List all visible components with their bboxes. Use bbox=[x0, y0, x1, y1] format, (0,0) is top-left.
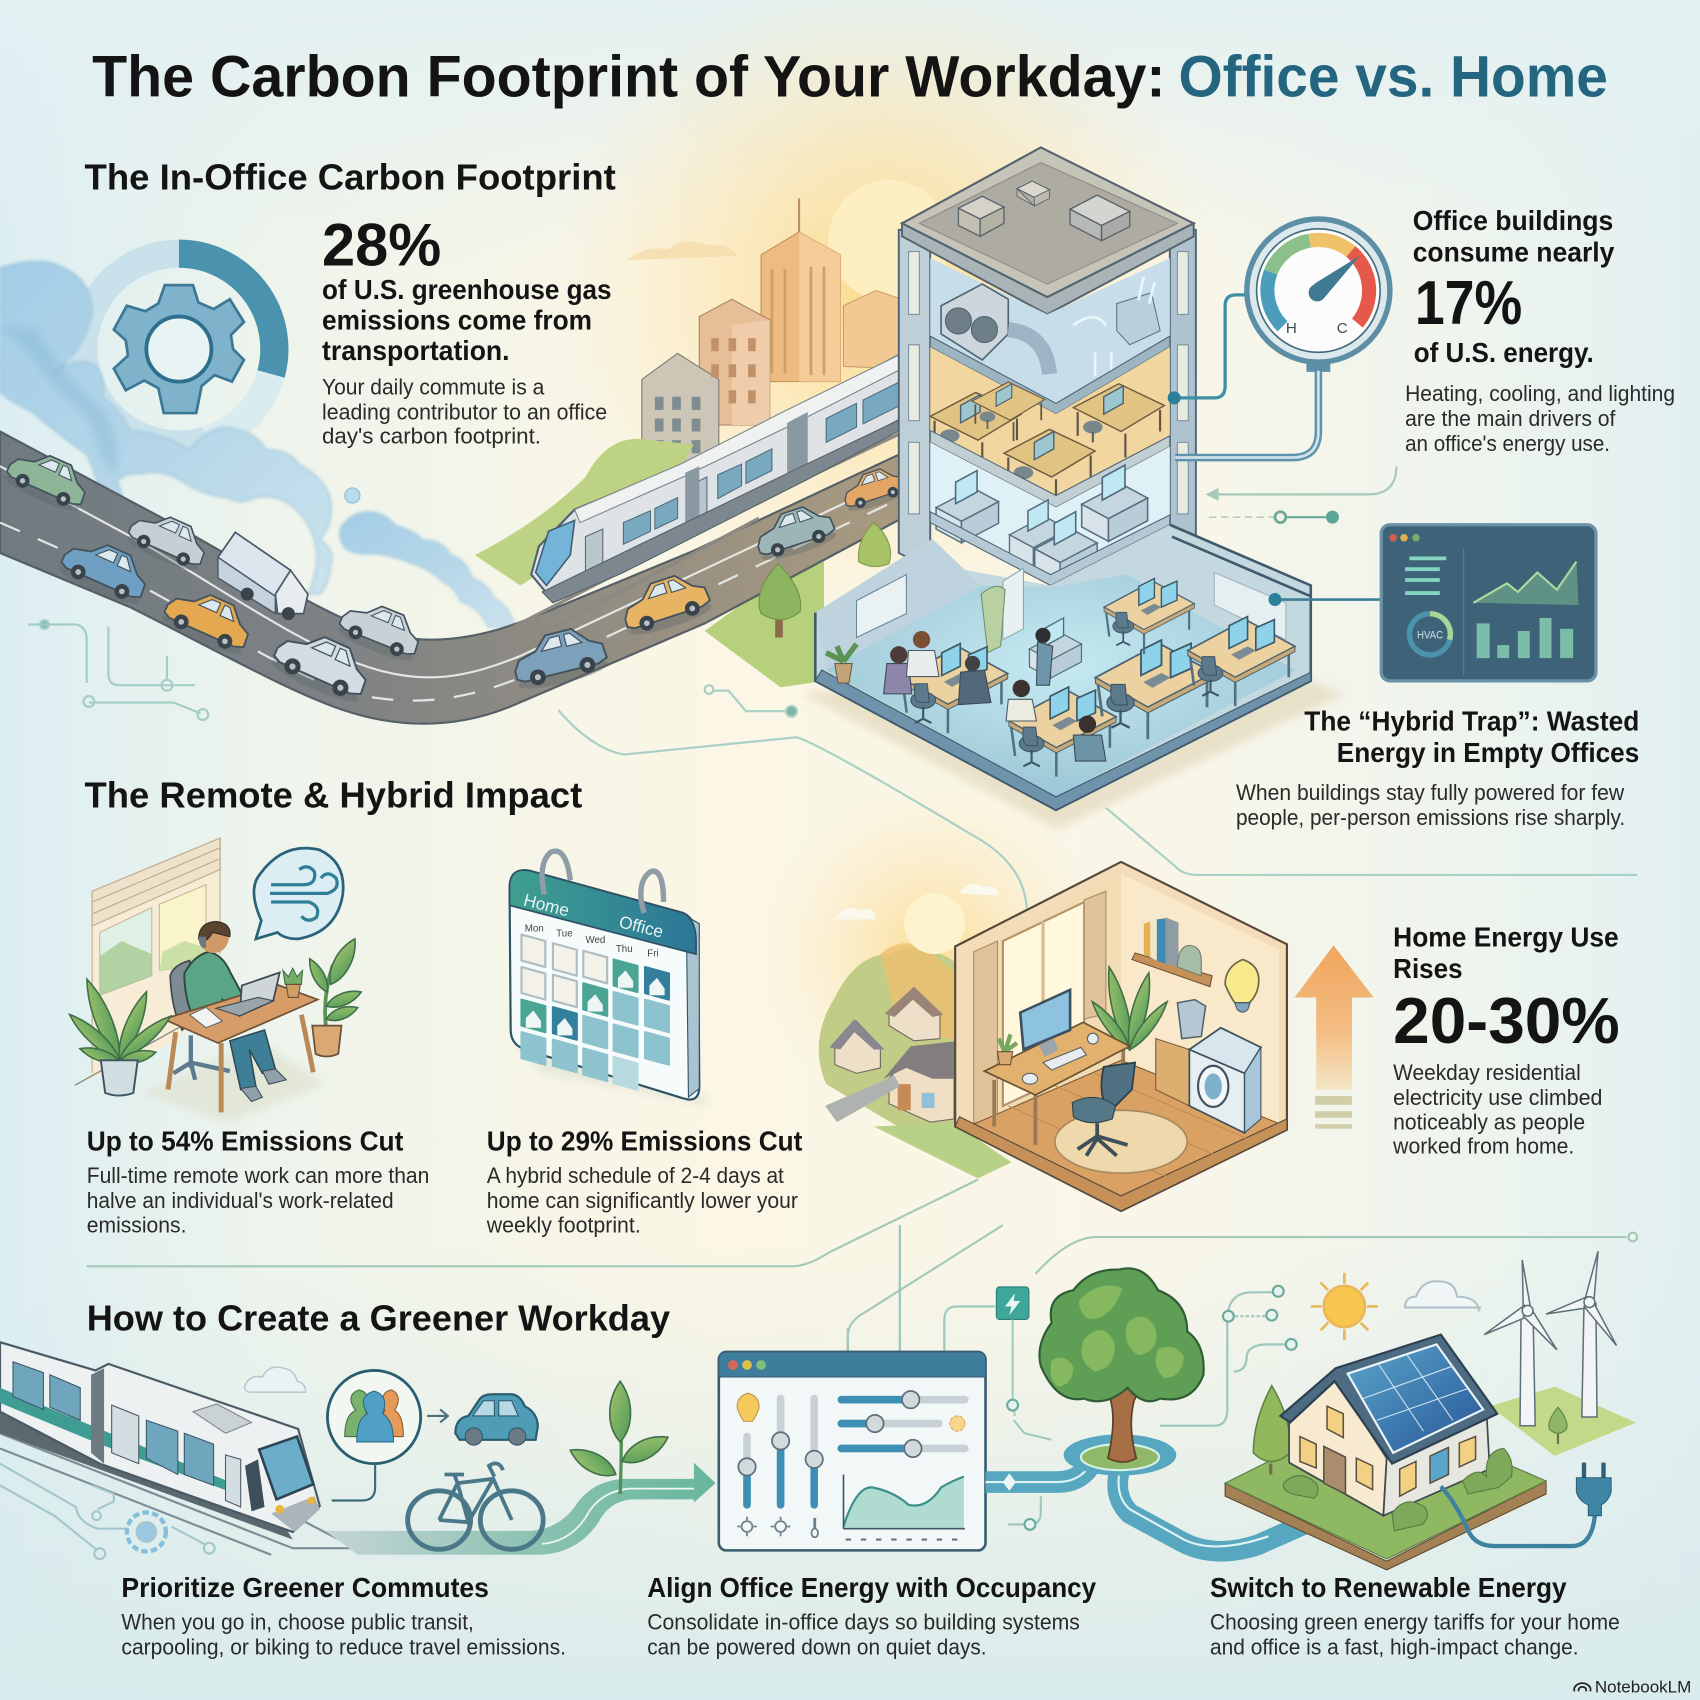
text: renewable tip bbox=[1210, 1571, 1620, 1659]
solar panel bbox=[1348, 1344, 1483, 1453]
title highlight: Office vs. Home bbox=[1179, 44, 1608, 109]
text: remote: Up to 54% Emissions Cut bbox=[87, 1124, 404, 1156]
title: The Carbon Footprint of Your Workday: bbox=[92, 44, 1165, 109]
illustration: calendar bbox=[510, 851, 710, 1106]
calendar grid bbox=[521, 935, 669, 1090]
chair bbox=[1072, 1062, 1135, 1156]
plug and cable bbox=[1441, 1463, 1611, 1546]
gauge connectors bbox=[1168, 295, 1318, 458]
weekday labels: Tue bbox=[556, 929, 573, 940]
light bulb bbox=[1225, 960, 1259, 1012]
weekday labels: Mon bbox=[525, 923, 544, 934]
text: remote: emissions. bbox=[87, 1213, 186, 1238]
floor: mechanical plant bbox=[930, 258, 1170, 414]
hill with wind turbines bbox=[1484, 1251, 1636, 1456]
green ground behind train bbox=[475, 439, 694, 585]
text: home energy bbox=[1392, 920, 1620, 1159]
weekday labels bbox=[525, 923, 659, 959]
donut chart: 28 percent bbox=[83, 254, 274, 445]
NotebookLM mark: NotebookLM bbox=[1595, 1678, 1691, 1696]
sliders horizontal bbox=[841, 1391, 965, 1457]
arrow: pointing to office bbox=[1206, 466, 1396, 501]
text: occupancy tip bbox=[647, 1571, 1096, 1659]
text: transportation stat: emissions come from bbox=[322, 304, 592, 336]
left wall bbox=[815, 539, 981, 670]
occupancy chart bbox=[843, 1474, 965, 1540]
office building bbox=[899, 147, 1196, 585]
delivery truck bbox=[218, 532, 308, 620]
text: hybrid trap: When buildings stay fully powered for few bbox=[1236, 780, 1625, 805]
rug bbox=[1055, 1110, 1187, 1173]
text: office energy: 17% bbox=[1415, 269, 1522, 338]
text: hybrid trap: Energy in Empty Offices bbox=[1337, 736, 1639, 768]
text: commute tip: When you go in, choose public transit, bbox=[121, 1610, 474, 1635]
plants bbox=[826, 644, 857, 661]
city skyline bbox=[627, 180, 950, 468]
shrubs bbox=[1283, 1448, 1512, 1531]
left wall bbox=[966, 874, 1121, 1128]
door and windows bbox=[1300, 1406, 1476, 1496]
text: renewable tip: Switch to Renewable Energy bbox=[1210, 1571, 1567, 1603]
illustration: house with solar panels bbox=[1225, 1335, 1546, 1570]
turbine bbox=[1546, 1251, 1617, 1417]
dashboard panel: HVAC bbox=[1417, 630, 1443, 642]
text: renewable tip: Choosing green energy tariffs for your home bbox=[1210, 1610, 1620, 1635]
window bbox=[1003, 902, 1084, 1106]
curtains bbox=[974, 891, 1106, 1123]
text: commute tip: carpooling, or biking to reduce travel emissions. bbox=[121, 1634, 566, 1659]
cars bbox=[2, 442, 909, 708]
text: office energy: Office buildings bbox=[1413, 204, 1613, 236]
floor: blue offices bbox=[930, 442, 1170, 585]
text: home energy: electricity use climbed bbox=[1393, 1085, 1602, 1110]
highway with traffic bbox=[0, 432, 909, 724]
wall panels bbox=[857, 575, 906, 638]
plant left bbox=[65, 976, 174, 1096]
icon: bicycle bbox=[408, 1463, 543, 1549]
roof bbox=[1280, 1335, 1497, 1464]
connector node line bbox=[1209, 511, 1339, 524]
text: commute tip bbox=[121, 1571, 566, 1659]
office ground floor bbox=[802, 525, 1344, 829]
circuit node decoration bbox=[0, 1464, 215, 1559]
circuit lines centre bbox=[558, 685, 1637, 909]
text: hybrid trap bbox=[1236, 705, 1639, 830]
floor bbox=[826, 575, 1296, 797]
calendar header: Home bbox=[522, 890, 571, 920]
illustration: tree bbox=[1039, 1268, 1204, 1476]
sliders vertical bbox=[738, 1399, 823, 1505]
roof bbox=[902, 147, 1194, 314]
heading: in-office: The In-Office Carbon Footprint bbox=[85, 158, 616, 198]
icon: car bbox=[455, 1394, 538, 1445]
calendar rings bbox=[542, 851, 664, 913]
people bbox=[884, 628, 1106, 761]
icon: lightning card bbox=[996, 1287, 1052, 1440]
laptop bbox=[240, 973, 280, 1016]
text: remote: halve an individual's work-related bbox=[87, 1188, 394, 1213]
energy flow line bbox=[986, 1466, 1306, 1551]
text: home energy: noticeably as people bbox=[1393, 1110, 1585, 1135]
bookshelf bbox=[1132, 917, 1212, 987]
rail lines bbox=[0, 1433, 379, 1555]
small icons bbox=[737, 1517, 818, 1537]
text: hybrid: weekly footprint. bbox=[486, 1213, 641, 1238]
circuit lines right of tree bbox=[1160, 1286, 1297, 1426]
column left and right bbox=[899, 230, 1196, 569]
kettle bbox=[1177, 1000, 1206, 1039]
tree near office bbox=[759, 523, 891, 638]
text: occupancy tip: can be powered down on quiet days. bbox=[647, 1634, 987, 1659]
train bbox=[0, 1342, 320, 1540]
neighbourhood bbox=[819, 884, 1012, 1179]
turbine bbox=[1484, 1260, 1557, 1426]
icon: gear bbox=[114, 285, 244, 413]
text: transportation stat: 28% bbox=[322, 211, 441, 279]
cloud bbox=[244, 1367, 306, 1392]
text: home energy: 20-30% bbox=[1393, 984, 1620, 1057]
washing machine bbox=[1189, 1028, 1261, 1133]
flow highlight bbox=[542, 1489, 694, 1544]
cabinet bbox=[1156, 1039, 1189, 1106]
text: hybrid: A hybrid schedule of 2-4 days at bbox=[487, 1163, 785, 1188]
window and blinds bbox=[75, 838, 220, 1085]
text: transportation stat: of U.S. greenhouse gas bbox=[322, 273, 611, 305]
text: hybrid: home can significantly lower your bbox=[487, 1188, 799, 1213]
circuit lines left bbox=[28, 620, 208, 720]
bulb small bbox=[737, 1393, 759, 1421]
text: remote: Full-time remote work can more than bbox=[87, 1163, 429, 1188]
arrow: energy rising bbox=[1295, 945, 1374, 1129]
train tracks bbox=[510, 434, 900, 640]
text: transportation stat: Your daily commute is a bbox=[322, 375, 545, 400]
illustration: energy control window bbox=[719, 1225, 995, 1550]
person at desk bbox=[164, 922, 318, 1112]
text: home energy: Rises bbox=[1393, 952, 1463, 984]
text: office energy: an office's energy use. bbox=[1405, 431, 1610, 456]
text: office energy: are the main drivers of bbox=[1405, 406, 1616, 431]
icon: carpool people bbox=[327, 1370, 421, 1501]
text: home energy: Weekday residential bbox=[1393, 1060, 1581, 1085]
text: transportation stat: day's carbon footprint. bbox=[322, 423, 541, 448]
icon: cloud bbox=[1405, 1281, 1480, 1310]
text: hybrid bbox=[486, 1124, 803, 1238]
text: office energy: of U.S. energy. bbox=[1414, 336, 1594, 368]
text: renewable tip: and office is a fast, high-impact change. bbox=[1210, 1634, 1579, 1659]
desk clusters bbox=[901, 644, 1008, 733]
plant right bbox=[305, 935, 363, 1057]
cypress bbox=[1253, 1386, 1290, 1461]
text: occupancy tip: Align Office Energy with Occupancy bbox=[647, 1571, 1096, 1603]
speech bubble bbox=[254, 848, 343, 939]
illustration: greener commutes bbox=[0, 1342, 716, 1559]
text: commute tip: Prioritize Greener Commutes bbox=[121, 1571, 489, 1603]
ground island bbox=[1225, 1407, 1546, 1570]
text: hybrid: Up to 29% Emissions Cut bbox=[487, 1124, 803, 1156]
desk bbox=[168, 1015, 313, 1112]
text: remote bbox=[87, 1124, 429, 1238]
side tree bbox=[1269, 1464, 1272, 1474]
temperature gauge bbox=[1247, 219, 1390, 372]
calendar office label: Office bbox=[617, 911, 665, 942]
desk with monitor bbox=[984, 990, 1130, 1145]
temperature gauge: C bbox=[1337, 320, 1348, 337]
smoke cloud bbox=[0, 261, 515, 627]
text: home energy: Home Energy Use bbox=[1393, 920, 1619, 952]
dashboard panel bbox=[1268, 525, 1596, 681]
grey to green flow arrow bbox=[325, 1463, 716, 1555]
floor: yellow offices bbox=[930, 347, 1170, 507]
text: hybrid trap: people, per-person emissions rise sharply. bbox=[1236, 805, 1625, 830]
small arrow to car bbox=[427, 1409, 448, 1422]
text: transportation stat: transportation. bbox=[322, 334, 510, 366]
illustration: home office bbox=[819, 862, 1287, 1211]
heading: remote and hybrid: The Remote & Hybrid Impact bbox=[85, 776, 582, 816]
base fill bbox=[815, 525, 1311, 810]
room shell bbox=[955, 862, 1287, 1211]
green ground by office bbox=[705, 562, 824, 687]
weekday labels: Thu bbox=[616, 944, 633, 955]
temperature gauge: H bbox=[1286, 320, 1297, 337]
floor bbox=[966, 1060, 1278, 1196]
text: hybrid trap: The “Hybrid Trap”: Wasted bbox=[1304, 705, 1639, 737]
commuter train bbox=[531, 353, 902, 603]
icon: sun bbox=[1311, 1273, 1378, 1340]
walls bbox=[1289, 1378, 1387, 1516]
icon: sprout bbox=[566, 1381, 672, 1494]
text: office energy bbox=[1405, 204, 1675, 456]
plant on desk bbox=[283, 968, 302, 997]
text: transportation stat: leading contributor to an office bbox=[322, 400, 607, 425]
text: transportation stat bbox=[322, 211, 611, 448]
plant bbox=[1088, 965, 1171, 1053]
text: office energy: consume nearly bbox=[1413, 235, 1615, 267]
illustration: remote worker bbox=[65, 838, 363, 1123]
text: home energy: worked from home. bbox=[1392, 1134, 1574, 1159]
text: occupancy tip: Consolidate in-office days so building systems bbox=[647, 1610, 1080, 1635]
weekday labels: Fri bbox=[647, 948, 659, 959]
section divider lines bbox=[87, 1180, 1637, 1355]
right wall bbox=[1121, 874, 1279, 1123]
text: office energy: Heating, cooling, and lighting bbox=[1405, 381, 1675, 406]
weekday labels: Wed bbox=[585, 935, 605, 946]
heading: greener workday: How to Create a Greener Workday bbox=[87, 1298, 670, 1338]
